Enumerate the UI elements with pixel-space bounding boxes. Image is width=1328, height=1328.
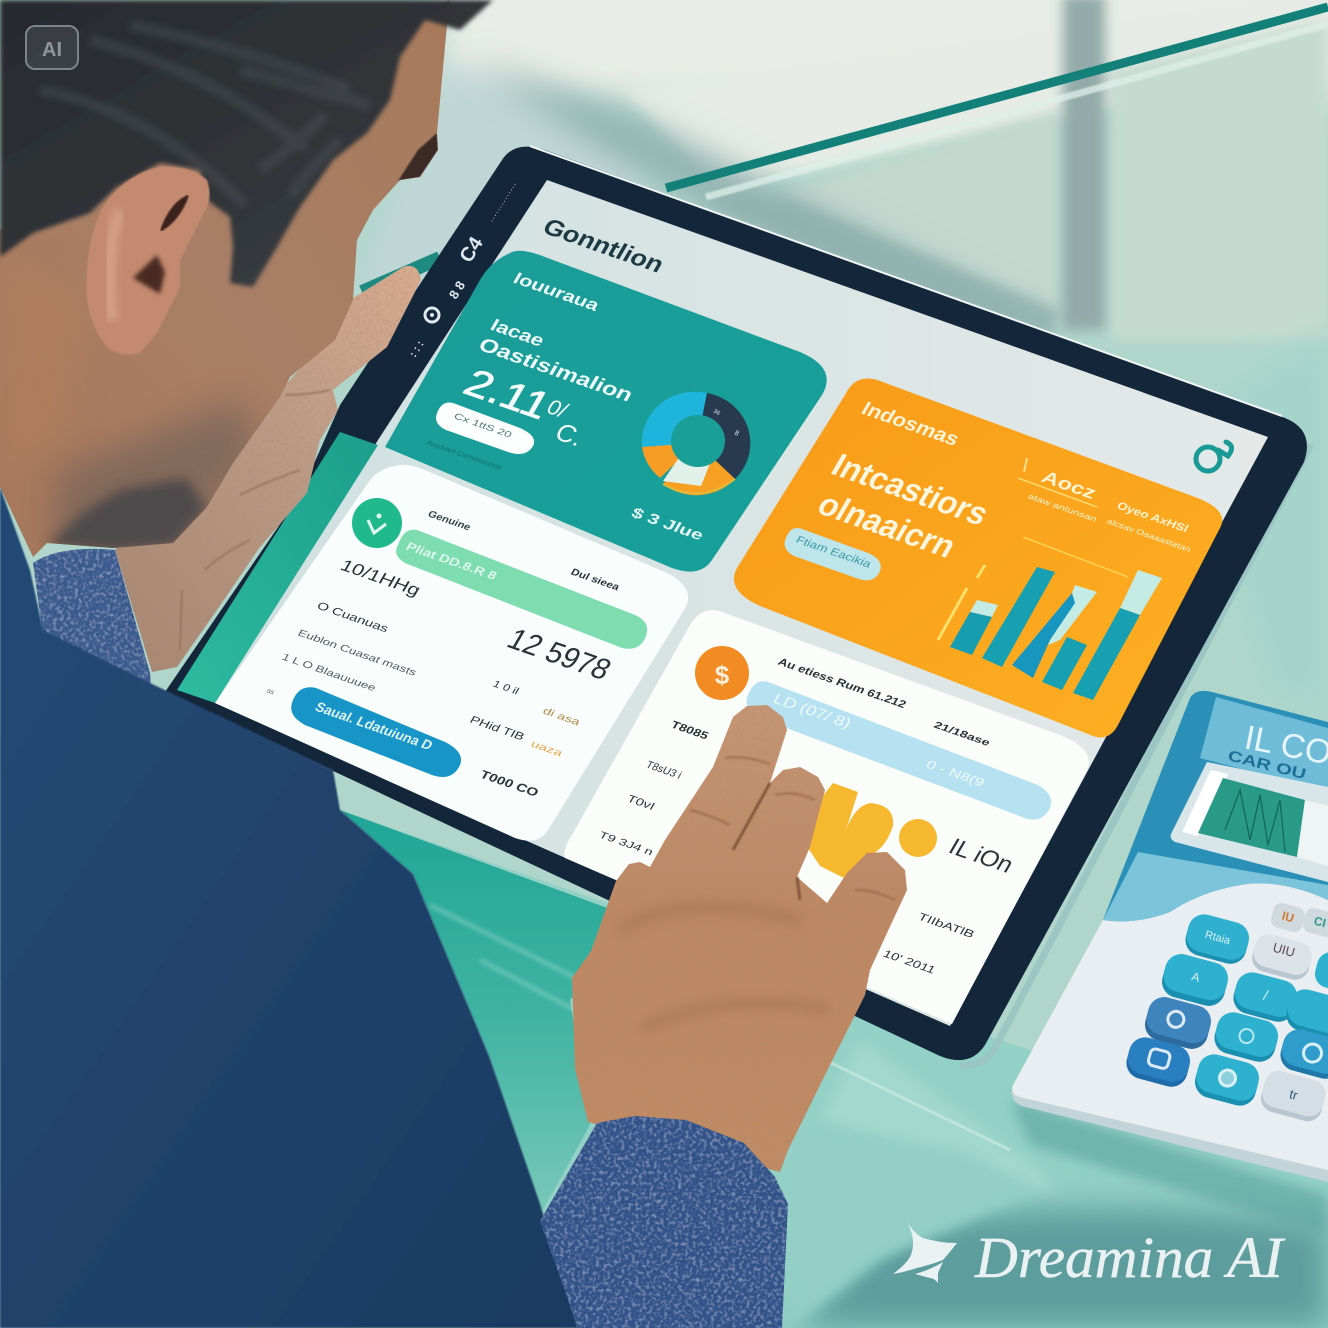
light blue progress bar: 0 - N8(9 bbox=[923, 758, 988, 790]
list rows bbox=[596, 719, 976, 976]
bezel icons: C4 bbox=[456, 233, 488, 267]
text rows: di asa bbox=[540, 706, 583, 728]
calculator keys: UIU bbox=[1271, 940, 1297, 960]
calculator keys: / bbox=[1262, 987, 1270, 1003]
text rows: uaza bbox=[528, 739, 565, 759]
yellow chart bbox=[796, 783, 937, 880]
panel: orange insights card bbox=[734, 378, 1222, 737]
panel: white transactions card bbox=[564, 610, 1089, 1024]
card footnote: Ausdvanl Cunnmissiona bbox=[425, 440, 502, 472]
card label: Iouuraua bbox=[510, 269, 603, 315]
text rows: T000 CO bbox=[477, 768, 541, 799]
blue action button: Saual. Ldatuiuna D bbox=[312, 699, 436, 753]
text rows: as bbox=[265, 688, 276, 696]
calculator bbox=[1012, 691, 1328, 1182]
pill button bbox=[436, 402, 534, 454]
left teal strip bbox=[177, 432, 378, 703]
text rows: 1 0 il bbox=[490, 679, 521, 697]
card heading bbox=[811, 447, 995, 565]
hair strands bbox=[40, 25, 370, 205]
stat block: Aocz bbox=[1038, 467, 1100, 503]
screen bbox=[215, 180, 1268, 1026]
calculator blue top bbox=[1103, 691, 1328, 921]
card heading: Iacae bbox=[487, 315, 548, 350]
person: navy sweater bbox=[0, 487, 578, 1328]
header text bbox=[775, 656, 992, 749]
badge: AI bbox=[26, 26, 78, 69]
calculator keys bbox=[1123, 901, 1328, 1124]
calculator base bbox=[1012, 1085, 1328, 1182]
person: right hand touching the screen bbox=[572, 705, 907, 1172]
donut chart: 8 bbox=[733, 430, 740, 438]
text rows: 12 5978 bbox=[501, 622, 617, 686]
header text: Au etiess Rum 61.212 bbox=[775, 656, 908, 711]
badge: AI: AI bbox=[42, 39, 62, 61]
icon: teal ring lock bbox=[1196, 442, 1232, 471]
donut chart bbox=[642, 392, 750, 495]
donut chart: 36 bbox=[712, 409, 721, 417]
big metric: 2.11 bbox=[456, 362, 558, 427]
person: head with face, ear and hair bbox=[0, 0, 493, 557]
stubble and jaw shadow bbox=[0, 133, 438, 552]
wordmark: Dreamina AI bbox=[974, 1225, 1286, 1290]
text rows: 10/1HHg bbox=[337, 556, 424, 600]
panel: teal summary card bbox=[385, 251, 827, 572]
big metric: C. bbox=[550, 419, 589, 452]
ear bbox=[87, 167, 210, 355]
list rows: T0vI bbox=[624, 793, 657, 813]
heading: dashboard title: Gonntlion bbox=[538, 214, 669, 278]
light blue progress bar bbox=[746, 681, 1051, 820]
green progress bar bbox=[396, 530, 647, 649]
person: left sweater cuff bbox=[33, 549, 152, 700]
card heading bbox=[474, 315, 637, 406]
chart value: IL iOn bbox=[944, 834, 1018, 878]
calculator display bbox=[1171, 762, 1328, 882]
bezel icons: : : : bbox=[407, 339, 427, 360]
icon: star logo mark bbox=[893, 1218, 957, 1283]
calculator keys: A bbox=[1190, 969, 1201, 985]
calculator keys: tr bbox=[1288, 1086, 1300, 1103]
header text: 21/18ase bbox=[931, 720, 992, 749]
bezel icons: 8 8 bbox=[446, 278, 468, 302]
hair bbox=[0, 0, 493, 287]
person: right sweater sleeve bbox=[540, 1116, 788, 1328]
stat block: Oyeo AxHSl bbox=[1114, 500, 1190, 535]
pill button: Ftiam Eacikia bbox=[793, 534, 874, 571]
top edge highlight bbox=[530, 146, 1282, 416]
bar chart bbox=[938, 537, 1162, 700]
text rows: Eublon Cuasat masts bbox=[295, 628, 418, 679]
blue action button bbox=[291, 687, 461, 777]
pill button bbox=[785, 528, 881, 580]
text rows: 1 L O Blaauuuee bbox=[279, 652, 378, 694]
light blue progress bar: LD (07/ 8) bbox=[770, 691, 854, 732]
text rows: O Cuanuas bbox=[314, 600, 391, 635]
pill button: Cx 1ttS 20 bbox=[452, 411, 514, 440]
tablet body and bezel bbox=[165, 147, 1307, 1060]
big metric: 0/ bbox=[542, 395, 573, 423]
text rows: PHid TIB bbox=[467, 714, 526, 743]
panel: white account card bbox=[215, 465, 688, 841]
green progress bar: Pliat DD.8.R 8 bbox=[403, 540, 500, 583]
card label: Indosmas bbox=[857, 398, 963, 450]
stat block: ataw antunsan bbox=[1026, 492, 1099, 523]
calculator keys: Rtaia bbox=[1204, 929, 1232, 947]
stat block: alcsav Oaaaastatan bbox=[1105, 517, 1193, 554]
card heading: olnaaicrn bbox=[811, 486, 962, 565]
face and neck bbox=[0, 0, 450, 557]
logo: Dreamina AI watermark bbox=[893, 1218, 1286, 1290]
icon: orange currency circle bbox=[695, 646, 749, 700]
list rows: 10' 2011 bbox=[880, 948, 938, 976]
icon: orange currency circle: $ bbox=[715, 660, 730, 690]
list rows: T8085 bbox=[668, 719, 710, 742]
bezel icons: . . . . . . . . . . . . . . bbox=[489, 181, 518, 223]
list rows: TIIbATlB bbox=[915, 911, 976, 941]
small label: Genuine bbox=[425, 509, 473, 533]
icon: green check circle bbox=[352, 498, 402, 548]
card caption: $ 3 Jlue bbox=[628, 505, 706, 544]
text rows bbox=[265, 556, 622, 799]
stat block bbox=[1018, 458, 1193, 554]
tablet bbox=[165, 146, 1311, 1066]
card heading: Intcastiors bbox=[825, 447, 995, 533]
card heading: Oastisimalion bbox=[474, 334, 637, 406]
list rows: T8sU3 i bbox=[643, 759, 684, 781]
list rows: T9 3J4 n bbox=[596, 830, 655, 858]
person: left hand holding tablet bbox=[115, 266, 421, 672]
text rows: Dul sieea bbox=[568, 567, 622, 593]
big metric bbox=[456, 362, 589, 452]
calculator label: CAR OU bbox=[1226, 747, 1308, 783]
calculator keys: CI bbox=[1312, 914, 1328, 930]
bezel icons bbox=[407, 181, 518, 360]
calculator keys: IU bbox=[1280, 909, 1296, 925]
tablet glass edge bbox=[960, 445, 1311, 1066]
